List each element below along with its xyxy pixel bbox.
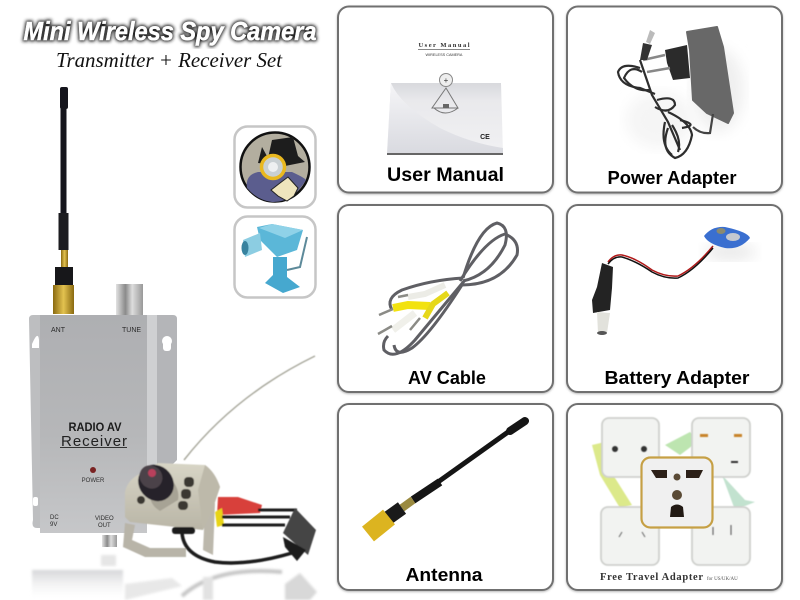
- icon tile: blue security camera: [234, 216, 316, 298]
- device label: RADIO AV Receiver: RADIO AV: [68, 422, 122, 434]
- caption: Free Travel Adapter: [600, 572, 703, 583]
- flanges: [29, 315, 177, 528]
- booklet photo: User Manual: [418, 42, 470, 49]
- cable connector: [283, 508, 316, 561]
- booklet photo: CE: [480, 134, 490, 141]
- port labels: OUT: [98, 523, 111, 529]
- world map background: [592, 432, 755, 510]
- receiver body: [40, 315, 147, 533]
- bracket: [123, 523, 186, 557]
- label: Power Adapter: [608, 167, 736, 188]
- tune knob: [116, 284, 143, 315]
- wire aerial: [184, 356, 315, 460]
- device label: RADIO AV Receiver: Receiver: [61, 433, 127, 450]
- label: AV Cable: [408, 367, 486, 388]
- antenna on receiver: [53, 87, 74, 314]
- panel: user manual: [338, 6, 553, 192]
- icon tile: spy with magnifying glass: [234, 126, 316, 208]
- panel: power adapter: [567, 6, 782, 192]
- port labels: ANT: [51, 327, 66, 334]
- lens: [131, 458, 181, 511]
- video out connector: [102, 535, 117, 547]
- booklet photo: +: [444, 76, 449, 85]
- port labels: 9V: [50, 522, 57, 528]
- camera housing: [125, 463, 220, 530]
- label: Battery Adapter: [604, 367, 750, 388]
- title: Mini Wireless Spy Camera: Mini Wireless Spy Camera: [24, 16, 316, 46]
- subtitle: Transmitter + Receiver Set: Transmitter + Receiver Set: [56, 48, 283, 72]
- panel: battery adapter: [567, 205, 782, 392]
- reflection: [32, 555, 317, 600]
- plug tiles: [601, 418, 750, 565]
- cable photo: [378, 223, 518, 354]
- booklet photo: [387, 42, 503, 155]
- booklet photo: WIRELESS CAMERA: [426, 53, 463, 57]
- keyhole slots: [32, 336, 172, 506]
- battery adapter photo: [592, 227, 756, 335]
- panel: antenna: [338, 404, 553, 590]
- photo: mini spy camera: [123, 356, 316, 563]
- caption: for US/UK/AU: [707, 577, 738, 582]
- port labels: DC: [50, 515, 59, 521]
- power LED: [82, 467, 105, 484]
- port labels: VIDEO: [95, 516, 114, 522]
- RCA plugs: [215, 497, 297, 527]
- port labels: [50, 327, 141, 529]
- label: User Manual: [387, 164, 504, 186]
- adapter photo: [618, 27, 744, 158]
- title: Mini Wireless Spy Camera: Mini Wireless Spy Camera: [24, 16, 316, 46]
- panel: AV cable: [338, 205, 553, 392]
- panel: free travel adapter: [567, 404, 782, 590]
- central universal adapter: [642, 458, 712, 528]
- power LED: POWER: [82, 478, 105, 484]
- port labels: TUNE: [122, 327, 141, 334]
- device label: RADIO AV Receiver: [60, 422, 127, 450]
- IR LEDs: [137, 477, 194, 510]
- label: Antenna: [406, 564, 483, 585]
- photo: wireless receiver with antenna: [29, 87, 317, 600]
- antenna photo: [368, 421, 525, 534]
